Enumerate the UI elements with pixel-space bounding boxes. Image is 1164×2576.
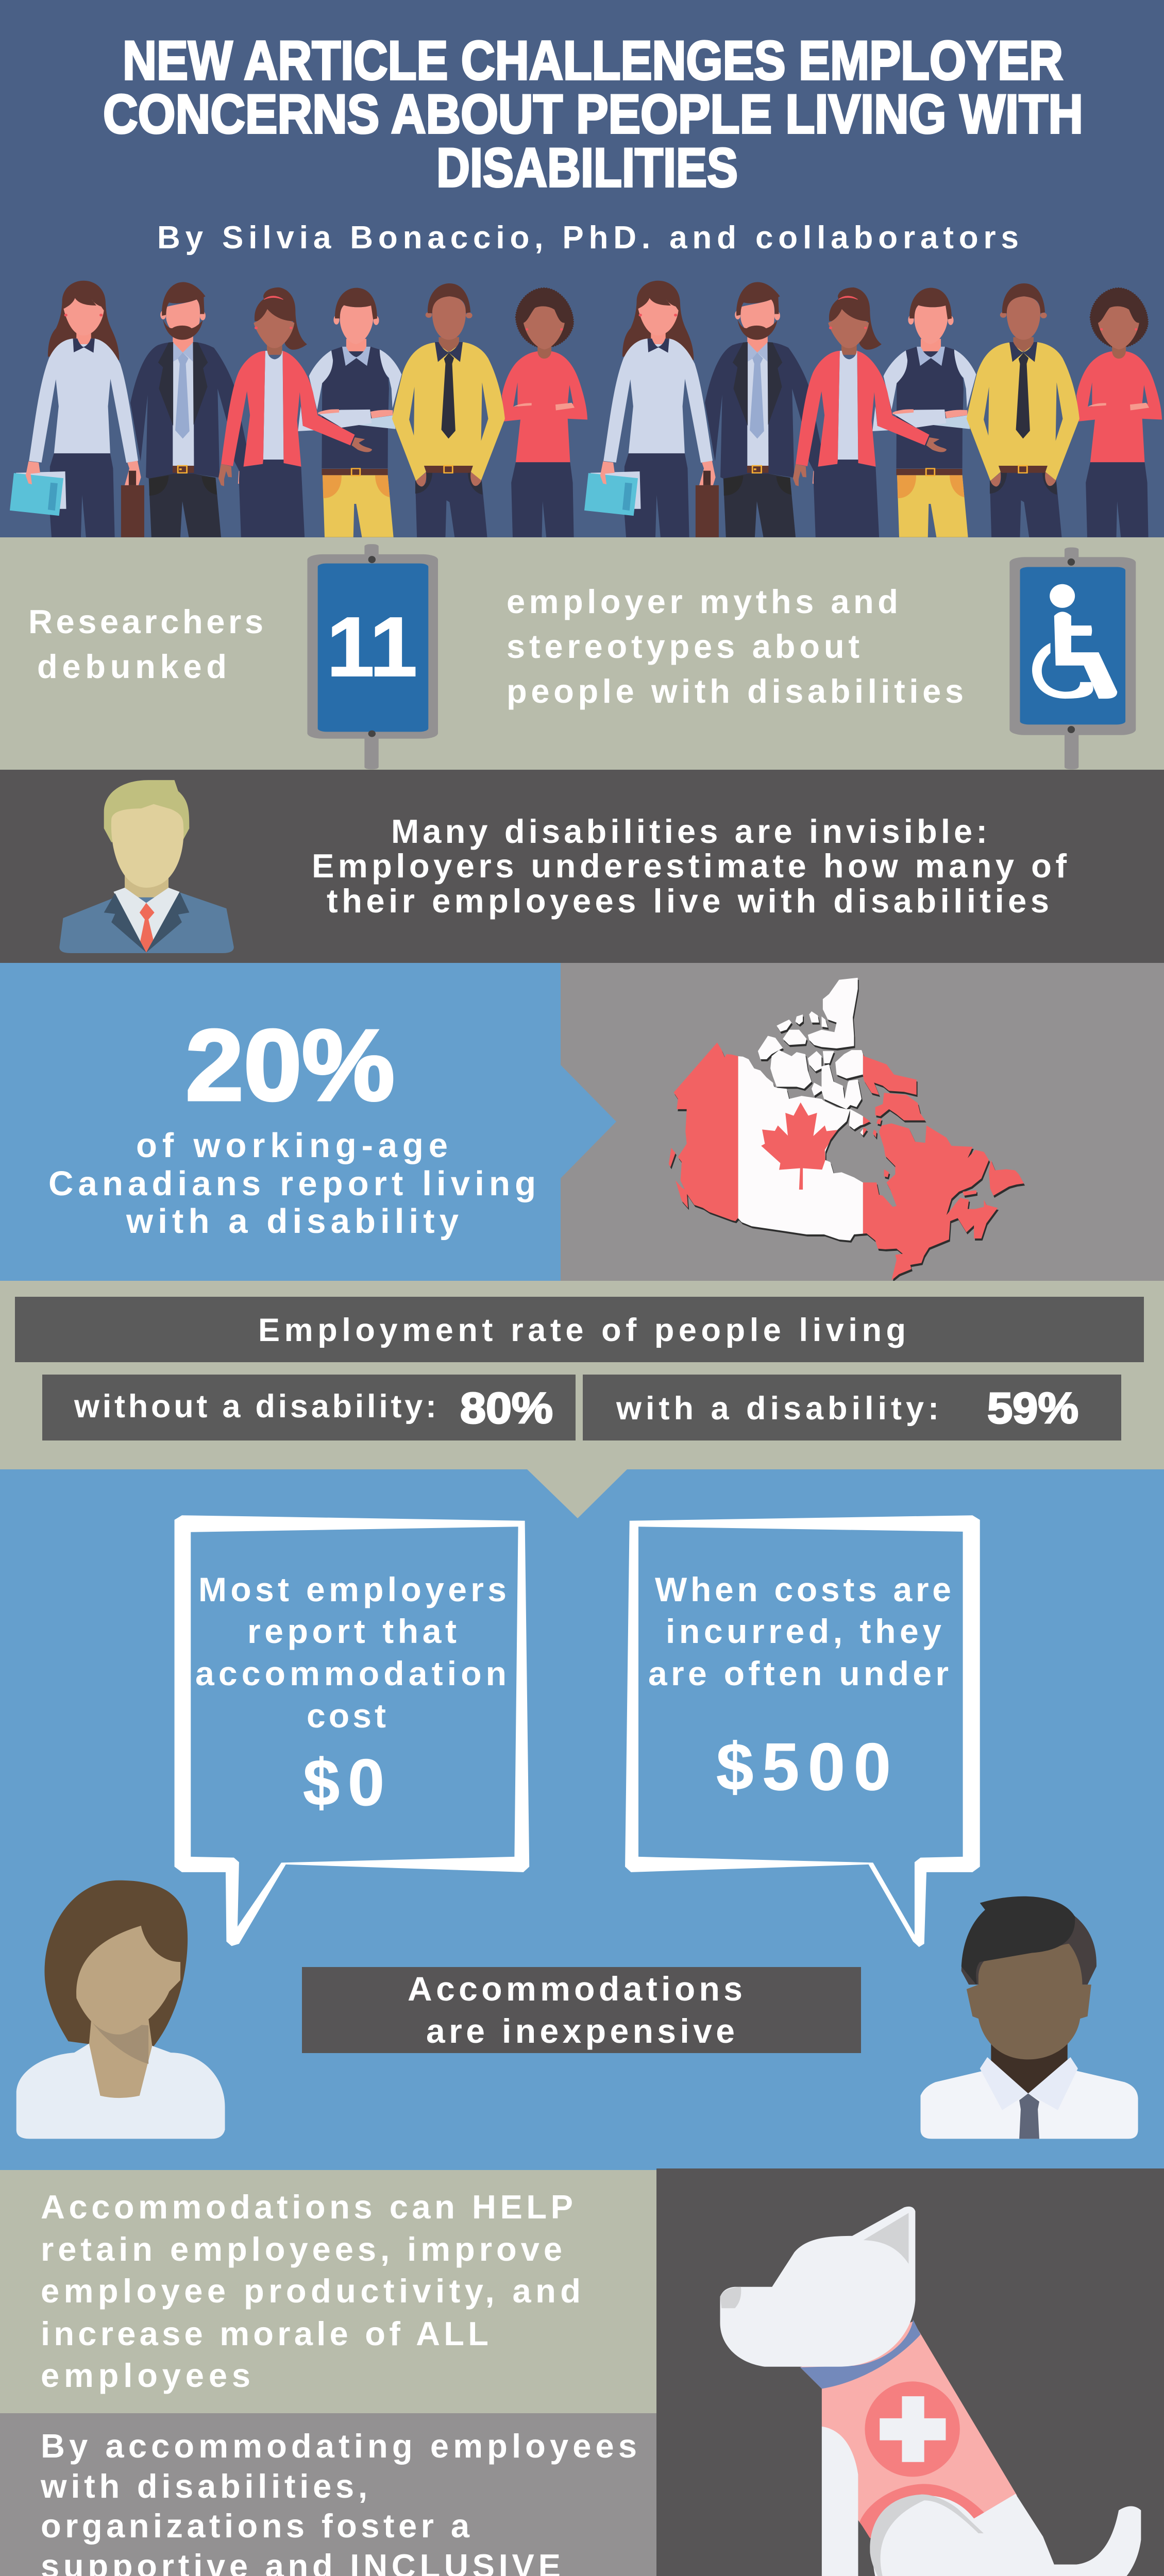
text: employer myths: employer myths and xyxy=(507,583,898,620)
callout: most employers report $0: report that xyxy=(247,1612,457,1650)
stat: with a disability: with a disability: xyxy=(616,1391,939,1427)
panel: service dog background xyxy=(656,2168,1164,2576)
panel: inclusive climate text xyxy=(0,2413,656,2576)
person: woman in pale blouse with folder xyxy=(10,281,144,537)
panel: 20 percent statistic with arrow xyxy=(0,963,616,1281)
panel: benefits text xyxy=(0,2170,656,2413)
callout: costs are often under $500: are often under xyxy=(648,1654,949,1692)
text: employer myths: stereotypes about xyxy=(507,628,859,665)
illustration: repeated group of colleagues xyxy=(584,281,1162,537)
panel: benefits text: employees xyxy=(41,2357,250,2394)
callout: most employers report $0: cost xyxy=(307,1697,386,1735)
text: researchers debunked: debunked xyxy=(37,648,227,685)
panel: map background xyxy=(561,963,1164,1281)
person: woman in red cardigan xyxy=(218,287,372,537)
panel: inclusive climate text: By accommodating employees xyxy=(41,2427,637,2465)
icon: road sign with number 11: 11 xyxy=(327,600,417,694)
panel: 20 percent statistic with arrow: 20% xyxy=(185,1009,395,1122)
map: Canada in flag colours xyxy=(669,978,1025,1281)
panel: inclusive climate text: organizations foster a xyxy=(41,2507,470,2545)
icon: service dog xyxy=(720,2207,1141,2576)
panel: inclusive climate text: with disabilities, xyxy=(40,2467,367,2505)
text: researchers debunked: Researchers xyxy=(28,603,263,640)
icon: woman employer xyxy=(16,1880,225,2139)
panel: benefits text: increase morale of ALL xyxy=(41,2315,488,2352)
icon: road sign with number 11 xyxy=(307,544,438,769)
person: man in yellow sweater xyxy=(392,283,505,537)
panel: benefits text: retain employees, improve xyxy=(41,2230,562,2268)
stat: with a disability: 59% xyxy=(987,1384,1078,1432)
stat: with a disability xyxy=(583,1375,1121,1440)
text: employer myths: people with disabilities xyxy=(507,672,964,710)
heading: employment rate xyxy=(15,1297,1144,1362)
person: man in navy jacket xyxy=(130,282,246,537)
byline: By Silvia Bonaccio, PhD. and collaborators xyxy=(157,220,1019,256)
icon: man employer xyxy=(920,1896,1138,2139)
title: DISABILITIES xyxy=(436,137,738,198)
callout: most employers report $0: Most employers xyxy=(198,1570,507,1608)
stat: without a disability xyxy=(42,1375,576,1440)
callout: costs are often under $500 xyxy=(625,1515,980,1947)
banner: accommodations are inexpensive xyxy=(302,1967,861,2053)
text: researchers debunked xyxy=(28,603,263,685)
panel: 20 percent statistic with arrow: with a disability xyxy=(126,1202,459,1241)
panel: 20 percent statistic with arrow: Canadians report living xyxy=(48,1164,536,1203)
panel: benefits text: Accommodations can HELP xyxy=(41,2188,573,2226)
icon: wheelchair sign xyxy=(1009,547,1136,769)
heading: employment rate: Employment rate of people living xyxy=(258,1312,906,1348)
callout: costs are often under $500: When costs are xyxy=(655,1570,951,1608)
panel: 20 percent statistic with arrow: of working-age xyxy=(136,1126,448,1165)
text: many disabilities are invisible xyxy=(312,812,1067,920)
callout: most employers report $0: accommodation xyxy=(195,1654,507,1692)
panel: benefits text: employee productivity, and xyxy=(41,2272,581,2310)
illustration: group of six colleagues xyxy=(10,281,587,537)
text: many disabilities are invisible: their employees live with disabilities xyxy=(327,882,1049,920)
person: man in navy vest xyxy=(298,288,401,537)
person: woman in coral sweater xyxy=(502,288,587,537)
panel: header background xyxy=(0,0,1164,538)
banner: accommodations are inexpensive: are inexpensive xyxy=(426,2012,735,2050)
stat: without a disability: without a disability: xyxy=(74,1388,436,1425)
pointer triangle xyxy=(527,1469,627,1518)
panel: employment band xyxy=(0,1281,1164,1469)
title xyxy=(103,29,1083,198)
icon: man in blue suit xyxy=(59,780,234,953)
banner: accommodations are inexpensive: Accommodations xyxy=(408,1970,743,2008)
callout: costs are often under $500: incurred, they xyxy=(666,1612,941,1650)
text: many disabilities are invisible: Employers underestimate how many of xyxy=(312,847,1067,885)
text: employer myths xyxy=(507,583,964,710)
callout: most employers report $0 xyxy=(175,1515,529,1946)
panel: myths band xyxy=(0,537,1164,770)
stat: without a disability: 80% xyxy=(460,1384,553,1432)
panel: invisible disabilities band xyxy=(0,770,1164,963)
callout: costs are often under $500: $500 xyxy=(716,1729,891,1804)
panel: accommodation cost xyxy=(0,1469,1164,2170)
text: many disabilities are invisible: Many disabilities are invisible: xyxy=(391,812,987,850)
callout: most employers report $0: $0 xyxy=(303,1746,384,1820)
